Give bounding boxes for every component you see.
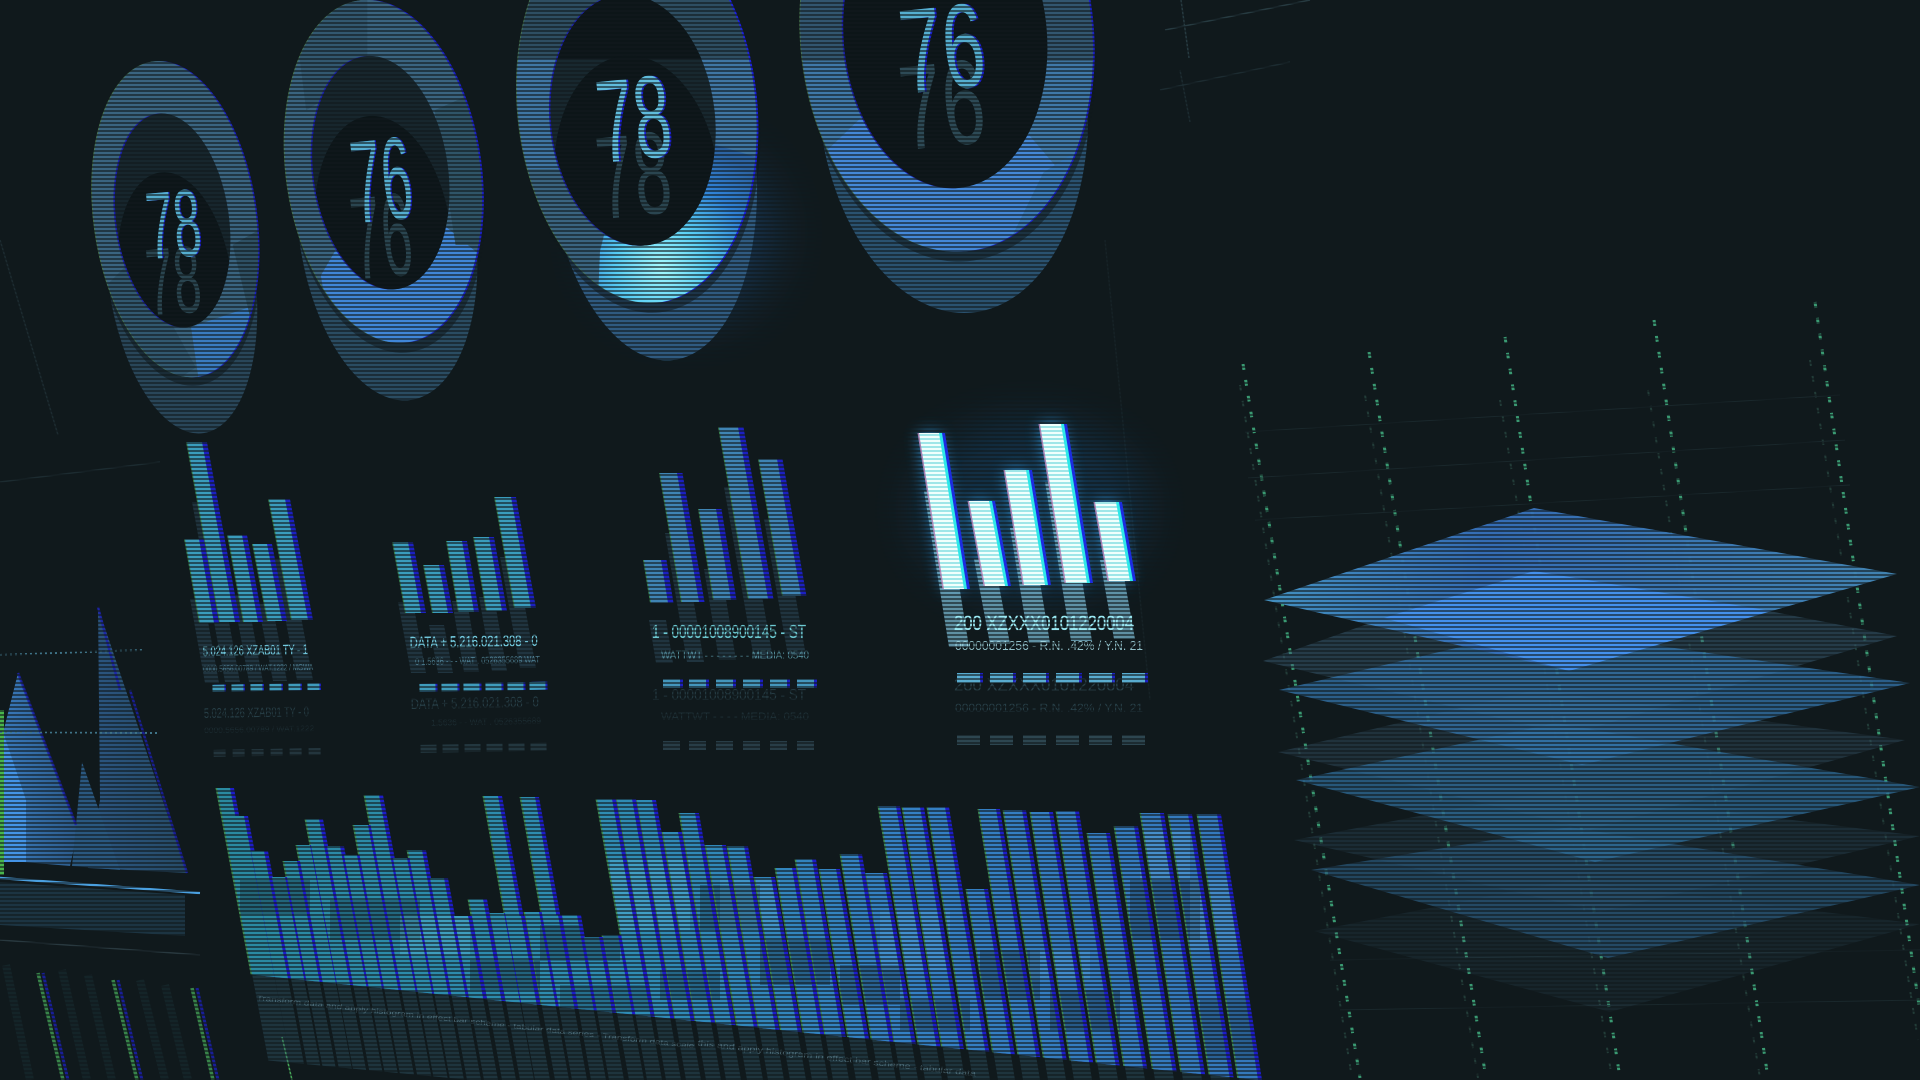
chart 1 label: 0000.5656.00789 / WAT.1222: [204, 724, 315, 735]
chart 3 label: 1 - 00001008900145 - ST: [652, 687, 806, 704]
donut gauge 4: 76: [799, 0, 1095, 313]
top plane: [1264, 508, 1897, 671]
histogram fine print: Transform data and apply histogram in effect bar scheme - tabular data series - Transform data scale: [256, 995, 695, 1050]
chart 2 label: [410, 633, 549, 753]
donut gauge 1: 78: 78: [142, 226, 205, 337]
chart 4 label: [954, 612, 1148, 745]
bar chart 3: [643, 427, 817, 750]
chart 1 label: 0000.5656.00789 / WAT.1222 / MGWA: [203, 662, 313, 674]
chart 4 label: 00000001256 - R.N. .42% / Y.N. 21: [955, 638, 1143, 653]
area chart at left edge: [0, 607, 200, 955]
donut gauge 2: 76: 76: [346, 112, 419, 249]
chart 1 label: 5.024.126 XZAB01 TY - 0: [204, 703, 309, 721]
lower-left stripes: [6, 965, 292, 1080]
chart 2 label: DATA + 5.216.021.308 - 0: [410, 633, 538, 652]
chart 2 label: 1.5636 - - WAT . 0526355689: [431, 716, 541, 728]
donut gauge 2: 76: 76: [345, 169, 418, 305]
chart 2 label: DATA + 5.216.021.308 - 0: [411, 694, 539, 713]
faint left and corner frame lines: [0, 0, 1310, 700]
donut gauge 1: 78: [91, 61, 260, 434]
top plane inner highlight: [1384, 571, 1771, 671]
histogram fine print: [256, 990, 977, 1080]
histogram fine print: this and apply histogram in effect bar scheme - tabular data: [697, 1039, 977, 1078]
chart 4 label: 200 XZXXX0101220004: [954, 675, 1134, 695]
donut gauge 3: 78 highlighted: 78: [592, 51, 679, 189]
layered planes: dotted guide lines: [1240, 302, 1920, 1078]
chart 4 label: 200 XZXXX0101220004: [954, 612, 1134, 635]
chart 3 label: 1 - 00001008900145 - ST: [652, 622, 806, 642]
chart 3 label: WATTWT - - - - - - - - MEDIA: 0540: [661, 648, 809, 662]
donut gauge 1: 78: 78: [142, 170, 205, 281]
layered planes stack: [1263, 508, 1920, 1012]
histogram reflection: [252, 975, 1254, 1080]
bar chart 2: [392, 497, 549, 753]
donut gauge 3: 78 highlighted: 78: [590, 107, 677, 245]
chart 4 label: 00000001256 - R.N. .42% / Y.N. 21: [955, 701, 1143, 715]
donut gauge 2: 76: 76: [345, 112, 418, 249]
donut gauge 4: 76: 76: [893, 34, 991, 176]
donut gauge 3: 78 highlighted: [497, 0, 784, 371]
histogram bars: [216, 788, 1262, 1080]
baseline highlight: [0, 878, 200, 893]
chart 1 label: 5.024.126 XZAB01 TY - 1: [203, 641, 308, 659]
donut gauge 3: 78 highlighted: 78: [590, 51, 677, 189]
chart base band: [0, 882, 185, 936]
donut gauge 1: 78: 78: [143, 170, 207, 281]
large histogram: [216, 788, 1262, 1080]
chart 3 label: [652, 622, 817, 750]
chart 1 label: [203, 641, 322, 757]
bright bar chart bars: [918, 424, 1136, 589]
bright bar chart glow: [915, 420, 1145, 647]
bar chart 1: [184, 442, 322, 757]
chart 2 label: 0 1.5636 - - - WAT . 0526355689 WAT: [415, 655, 540, 668]
chart 3 label: WATTWT - - - - MEDIA: 0540: [661, 711, 809, 723]
donut gauge 2: 76: [284, 0, 484, 400]
